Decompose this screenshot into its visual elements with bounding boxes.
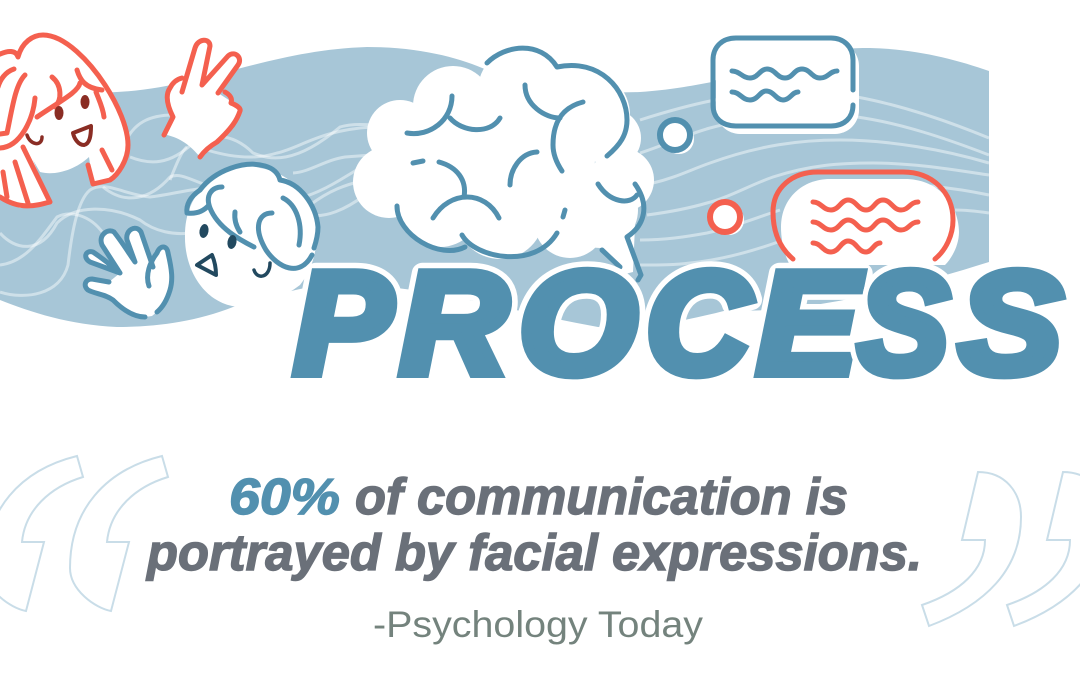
title: PROCESS: S <box>858 242 949 404</box>
title: PROCESS: S <box>959 242 1062 404</box>
red speech bubble <box>773 172 959 265</box>
boy eye left <box>198 223 210 239</box>
title: PROCESS: O <box>519 242 637 404</box>
boy hair <box>187 164 318 268</box>
boy smile line <box>254 263 270 276</box>
title: PROCESS: C <box>646 242 752 404</box>
title: PROCESS: P <box>294 242 392 404</box>
icon: opening quotation marks <box>0 456 168 611</box>
girl mouth <box>73 126 91 145</box>
boy mouth <box>197 255 216 275</box>
character: boy with blue hair <box>185 164 318 307</box>
title: PROCESS: P <box>294 242 392 404</box>
title: PROCESS: S <box>858 242 949 404</box>
blue speech bubble <box>713 38 859 134</box>
small red circle <box>710 202 744 235</box>
girl eyes <box>54 106 64 120</box>
title: PROCESS: R <box>400 242 508 404</box>
girl eye right <box>80 95 90 109</box>
flowing lines left <box>0 115 372 295</box>
flowing lines right <box>640 92 989 265</box>
quote text <box>145 468 922 581</box>
line 2: portrayed by facial expressions. <box>145 524 922 581</box>
boy eye right <box>226 234 238 250</box>
title: PROCESS: R <box>400 242 508 404</box>
icon: closing quotation marks <box>922 472 1080 626</box>
title: PROCESS: E <box>757 242 862 404</box>
attribution: -Psychology Today <box>373 604 704 645</box>
icon: peace sign hand <box>164 39 240 157</box>
girl smile line <box>27 135 42 144</box>
brain folds <box>397 48 644 280</box>
icon: brain thought cloud <box>353 48 654 280</box>
title: PROCESS <box>294 242 1062 404</box>
statistic 60%: 60% <box>229 468 340 525</box>
title: PROCESS: C <box>646 242 752 404</box>
girl hair <box>0 35 128 206</box>
girl head fill <box>0 35 128 208</box>
character: girl with red hair <box>0 35 128 208</box>
small blue circle <box>660 120 694 154</box>
boy head fill <box>185 166 317 307</box>
line 1: of communication is <box>355 468 848 525</box>
title: PROCESS: E <box>757 242 862 404</box>
title: PROCESS: O <box>519 242 637 404</box>
icon: waving hand <box>85 228 172 317</box>
title: PROCESS: S <box>959 242 1062 404</box>
wave band background <box>0 47 989 328</box>
